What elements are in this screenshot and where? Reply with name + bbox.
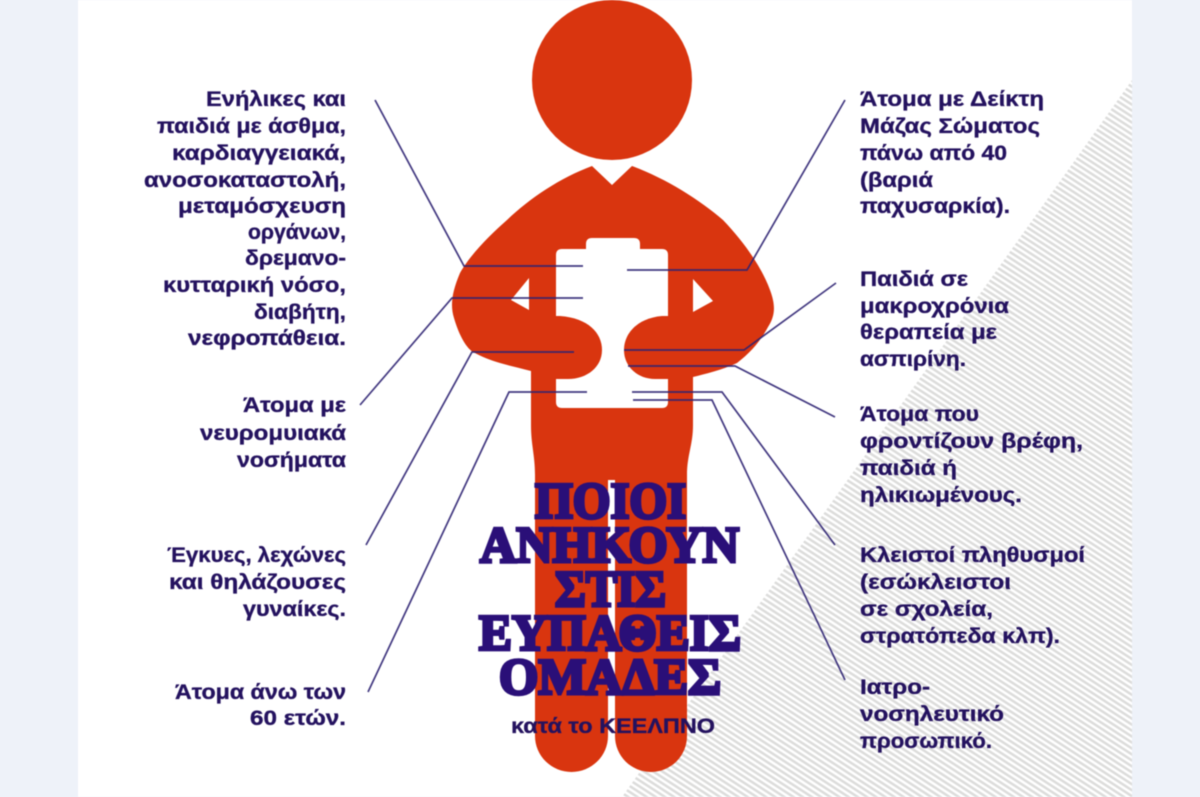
text: carers: Άτομα που [860,403,979,426]
text: closed populations: σε σχολεία, [860,598,993,621]
text: medical staff: προσωπικό. [860,730,992,753]
left hand [531,316,602,379]
text: children on aspirin: θεραπεία με [860,321,997,344]
title: ΑΝΗΚΟΥΝ [480,518,739,574]
text: pregnant women: Έγκυες, λεχώνες [167,544,346,567]
text: closed populations: Κλειστοί πληθυσμοί [860,544,1085,567]
text: neuromuscular conditions: νευρομυιακά [200,422,346,445]
text: medical staff: νοσηλευτικό [860,703,1004,726]
text: children on aspirin: μακροχρόνια [860,295,1009,318]
right hand [624,316,693,379]
text: neuromuscular conditions [200,394,346,472]
right arm gap [693,279,713,312]
head [532,0,692,160]
text: adults and children with chronic conditions: Ενήλικες και [206,88,346,111]
text: adults and children with chronic conditions: παιδιά με άσθμα, [157,115,346,138]
text: carers: παιδιά ή [860,457,957,480]
text: over 60: 60 ετών. [250,707,346,730]
figure: person holding clipboard [452,0,774,772]
title: ΠΟΙΟΙ [535,474,686,530]
text: adults and children with chronic conditions: κυτταρική νόσο, [163,274,346,297]
text: closed populations: στρατόπεδα κλπ). [860,625,1060,648]
text: over 60 [175,681,346,730]
text: medical staff [860,676,1004,753]
text: body mass index [860,88,1044,218]
text: body mass index: (βαριά [860,169,933,192]
text: adults and children with chronic conditions: μεταμόσχευση [178,195,346,218]
text: pregnant women: και θηλάζουσες [169,571,346,594]
text: over 60: Άτομα άνω των [175,681,346,704]
title: ΕΥΠΑΘΕΙΣ [479,606,741,662]
text: body mass index: παχυσαρκία). [860,195,1010,218]
text: children on aspirin: ασπιρίνη. [860,348,966,371]
text: neuromuscular conditions: νοσήματα [237,449,346,472]
leader lines [360,100,845,692]
text: neuromuscular conditions: Άτομα με [243,394,346,417]
subtitle: κατά το ΚΕΕΛΠΝΟ [511,715,715,738]
text: adults and children with chronic conditions: ανοσοκαταστολή, [144,169,346,192]
text: closed populations [860,544,1085,648]
text: pregnant women: γυναίκες. [243,598,346,621]
text: closed populations: (εσώκλειστοι [860,571,1011,594]
text: adults and children with chronic conditions: δρεμανο- [245,247,346,270]
text: adults and children with chronic conditions: οργάνων, [248,221,346,244]
text: adults and children with chronic conditions: καρδιαγγειακά, [172,142,346,165]
text: body mass index: Μάζας Σώματος [860,115,1040,138]
text: pregnant women [167,544,346,621]
text: carers: φροντίζουν βρέφη, [860,430,1083,453]
background: hatched corner [622,80,1132,797]
text: adults and children with chronic conditions: νεφροπάθεια. [188,327,346,350]
body and legs [452,166,774,772]
text: children on aspirin [860,268,1009,371]
text: body mass index: πάνω από 40 [860,142,1007,165]
text: body mass index: Άτομα με Δείκτη [860,88,1044,111]
clipboard [556,238,668,408]
left arm gap [511,278,529,310]
text: adults and children with chronic conditions: διαβήτη, [254,301,346,324]
text: carers [860,403,1083,507]
title [479,474,741,706]
text: children on aspirin: Παιδιά σε [860,268,968,291]
text: carers: ηλικιωμένους. [860,484,1022,507]
text: medical staff: Ιατρο- [860,676,930,699]
text: adults and children with chronic conditions [144,88,346,350]
title: ΟΜΑΔΕΣ [499,650,721,706]
title: ΣΤΙΣ [555,562,666,618]
